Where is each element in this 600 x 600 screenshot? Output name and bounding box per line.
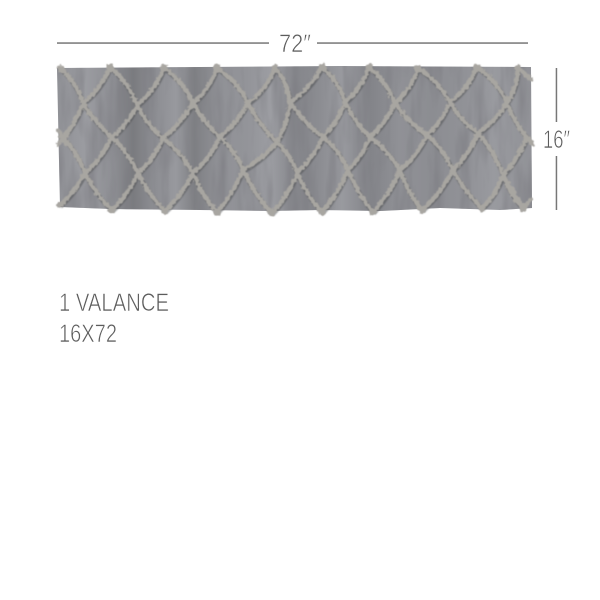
lattice shadow	[61, 69, 528, 215]
fabric mottling	[57, 66, 533, 212]
product label: 16X72	[59, 320, 117, 348]
height dimension: 16 inches: 16″	[543, 126, 570, 154]
valance fabric panel	[57, 66, 533, 215]
product label: 1 VALANCE	[59, 289, 169, 317]
fabric base	[57, 66, 532, 211]
chenille lattice	[58, 67, 532, 213]
product label	[59, 289, 169, 348]
lattice tufts at the hems	[60, 67, 523, 213]
width dimension: 72 inches: 72″	[279, 30, 311, 58]
